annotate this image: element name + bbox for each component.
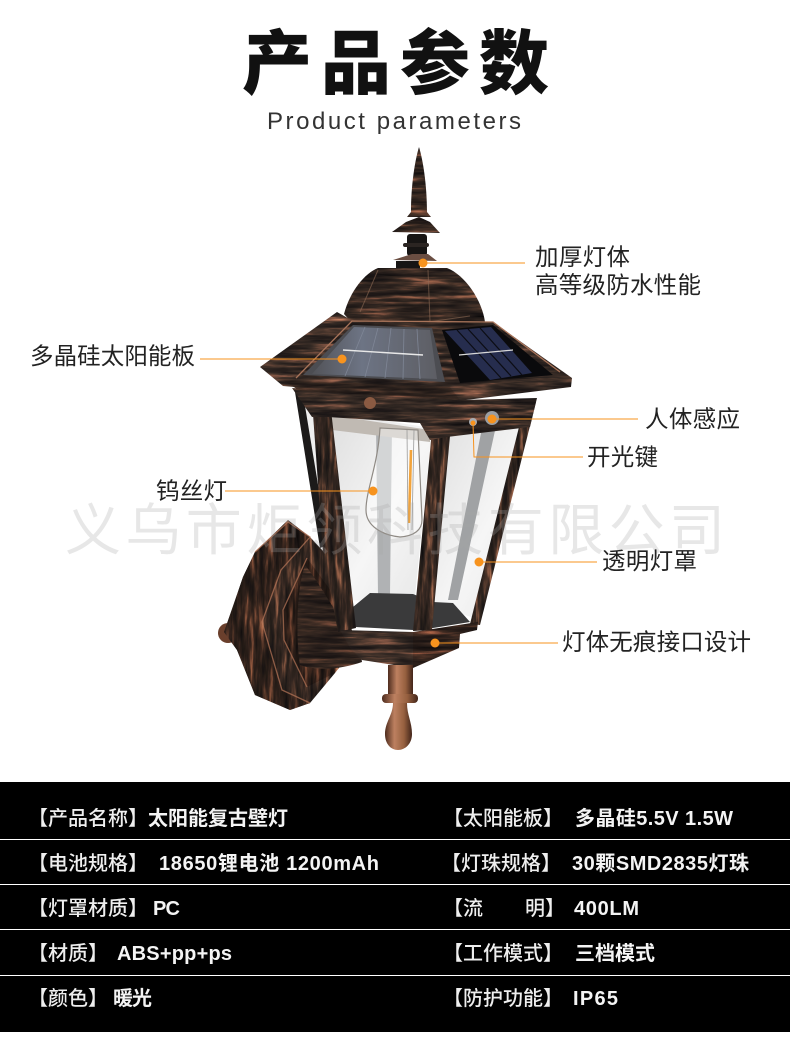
callout: thick body (418, 244, 701, 298)
subtitle: Product parameters (267, 108, 521, 135)
roof (260, 312, 572, 401)
row 3: 400LM (574, 898, 639, 920)
row 2: 30颗SMD2835灯珠 (572, 852, 749, 875)
row 5: IP65 (573, 988, 618, 1010)
lantern base band (340, 622, 478, 668)
product photo: solar wall lamp (218, 147, 572, 750)
row 1: 【产品名称】 (28, 802, 148, 831)
lantern glass panes (298, 395, 530, 627)
row dividers (0, 840, 790, 976)
lantern posts (295, 392, 536, 632)
sensors and switch (469, 411, 499, 426)
row 3 (28, 892, 639, 921)
row 4: 三档模式 (575, 942, 655, 965)
row 5: 【颜色】 (28, 982, 108, 1011)
interior floor (353, 593, 470, 630)
row 1: 多晶硅5.5V 1.5W (575, 807, 733, 830)
polysilicon solar panel right (442, 325, 553, 383)
table background (0, 782, 790, 1032)
callout: body sensor (488, 406, 740, 432)
row 5 (28, 982, 618, 1011)
dome (344, 268, 485, 325)
row 5: 暖光 (113, 987, 152, 1010)
row 3: 【流 (443, 892, 483, 921)
callout: thick body: 高等级防水性能 (535, 272, 701, 298)
polysilicon solar panel front (303, 325, 445, 382)
row 2: 【电池规格】 (28, 847, 148, 876)
row 3: 【灯罩材质】 (28, 892, 148, 921)
title: 产品参数 (242, 8, 549, 109)
callout: seamless joint (430, 629, 751, 655)
lower stem and finial knob (382, 665, 418, 750)
callout: transparent shade: 透明灯罩 (602, 548, 697, 574)
callout: tungsten bulb: 钨丝灯 (156, 478, 227, 504)
callout: switch (470, 420, 658, 470)
callout: tungsten bulb (156, 478, 378, 504)
row 1: 【太阳能板】 (443, 802, 563, 831)
lantern upper band (292, 388, 537, 440)
row 2: 18650锂电池 1200mAh (159, 852, 379, 875)
callouts (30, 244, 751, 655)
callout: transparent shade (474, 548, 697, 574)
row 4: ABS+pp+ps (117, 943, 232, 965)
callout: body sensor: 人体感应 (645, 406, 740, 432)
callout: solar panel: 多晶硅太阳能板 (30, 343, 195, 369)
row 2 (28, 847, 749, 876)
callout: switch: 开光键 (587, 444, 658, 470)
mount arm (297, 565, 362, 669)
parameters table (0, 782, 790, 1032)
row 1 (28, 802, 733, 831)
row 3: PC (153, 898, 180, 920)
callout: seamless joint: 灯体无痕接口设计 (562, 629, 751, 655)
row 2: 【灯珠规格】 (441, 847, 561, 876)
row 4: 【工作模式】 (443, 937, 563, 966)
bulb with tungsten filament (366, 428, 422, 537)
row 1: 太阳能复古壁灯 (148, 806, 288, 830)
row 4 (28, 937, 655, 966)
top spire (392, 147, 440, 268)
callout: thick body: 加厚灯体 (535, 244, 630, 270)
row 4: 【材质】 (28, 937, 108, 966)
row 5: 【防护功能】 (443, 982, 563, 1011)
row 3: 明】 (525, 892, 565, 921)
watermark: 义乌市炬领科技有限公司 (65, 486, 725, 567)
wall mount plate (218, 520, 357, 710)
callout: solar panel (30, 343, 346, 369)
